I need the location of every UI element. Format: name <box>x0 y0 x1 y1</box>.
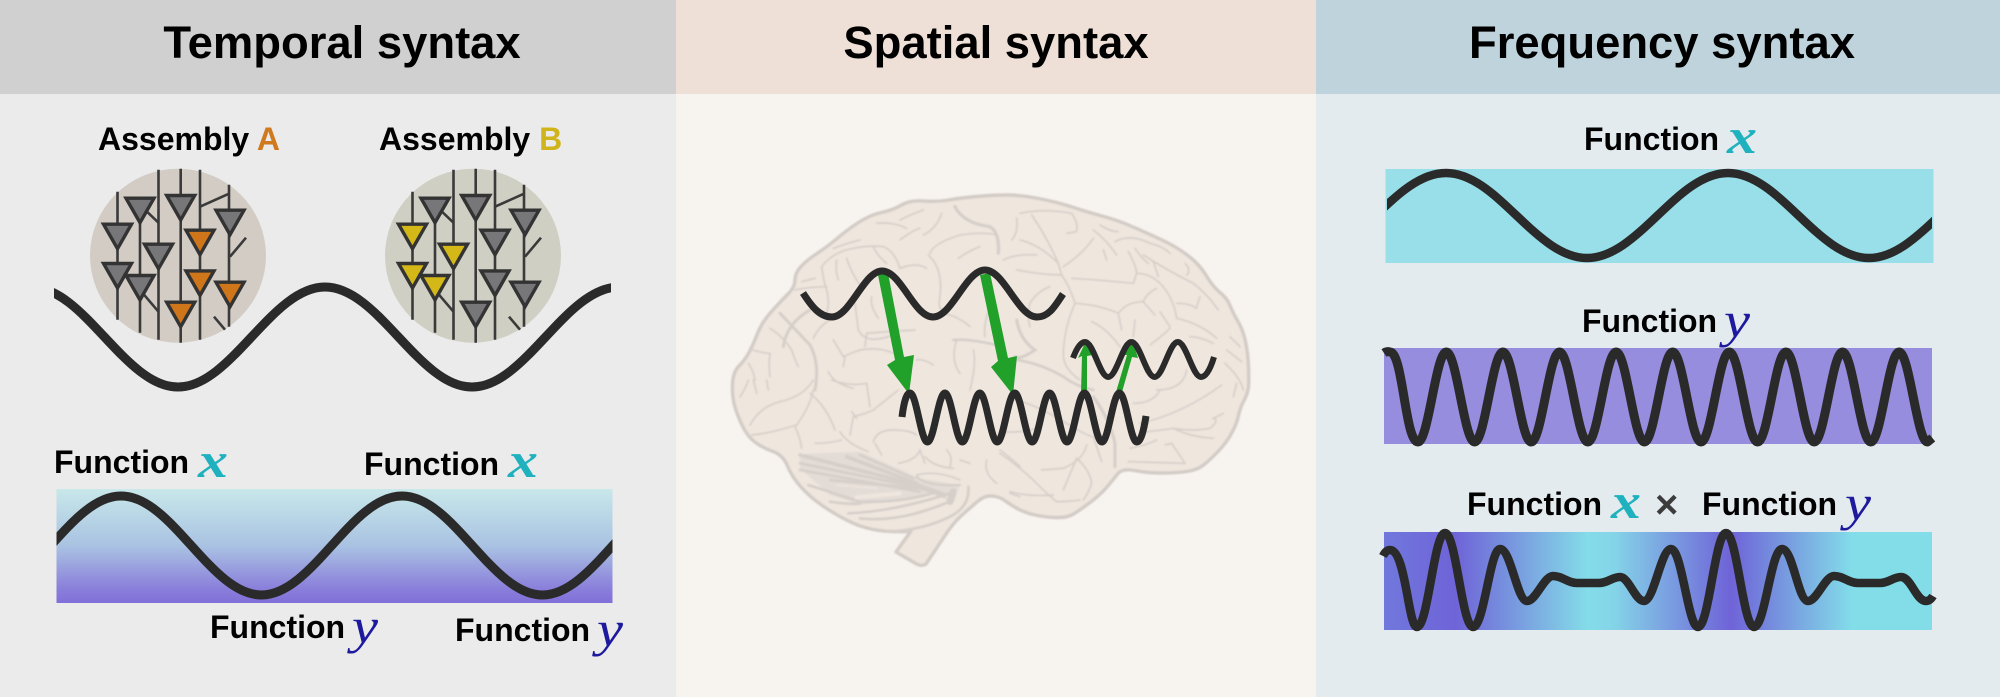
brain outline <box>732 195 1249 565</box>
temporal header bar <box>0 0 676 94</box>
wave: high frequency <box>1384 352 1932 442</box>
label: assembly A: Assembly A <box>98 121 280 157</box>
label: function y left: y <box>346 598 379 654</box>
label: function x <box>1584 108 1757 164</box>
label: function x right: Function <box>364 446 499 482</box>
label: function x times function y: Function <box>1467 486 1602 522</box>
neuron circle: assembly A <box>90 169 266 343</box>
label: function y left <box>210 598 379 654</box>
wave: slow oscillation on brain <box>803 270 1063 317</box>
label: function x: x <box>1726 108 1757 164</box>
label: function x left: Function <box>54 444 189 480</box>
band: product <box>1384 532 1932 630</box>
green arrows between regions <box>878 273 1138 395</box>
brain illustration <box>732 195 1249 565</box>
wave: low frequency <box>1387 168 1932 262</box>
label: function x right: x <box>507 432 538 488</box>
wave: medium oscillation on brain <box>1073 342 1214 377</box>
label: function x times function y <box>1467 473 1872 531</box>
brain sulci <box>740 207 1243 532</box>
label: function y right: y <box>591 601 624 657</box>
label: function y right <box>455 601 624 657</box>
label: function y right: Function <box>455 612 590 648</box>
label: function x times function y: x <box>1610 473 1641 529</box>
label: function x right <box>364 432 538 488</box>
heading: frequency syntax: Frequency syntax <box>1469 17 1855 68</box>
spatial header bar <box>676 0 1316 94</box>
arrow: slow wave to fast wave 2 <box>980 273 1017 395</box>
frequency header bar <box>1316 0 2000 94</box>
label: function x times function y: × <box>1655 483 1678 527</box>
band: function x <box>1386 169 1934 263</box>
oscillation wave under assemblies <box>31 287 619 387</box>
panel: spatial syntax <box>676 0 1316 697</box>
panel: frequency syntax <box>1305 0 2000 697</box>
neuron circle: assembly B <box>385 169 561 343</box>
heading: temporal syntax: Temporal syntax <box>163 17 521 68</box>
label: function y: y <box>1718 292 1751 348</box>
gradient band: temporal function <box>56 489 612 603</box>
label: function x left: x <box>197 432 228 488</box>
label: function y: Function <box>1582 303 1717 339</box>
label: function x times function y: y <box>1839 475 1872 531</box>
heading: spatial syntax: Spatial syntax <box>843 17 1149 68</box>
band: function y <box>1384 348 1932 444</box>
wave: product of functions <box>1383 533 1933 627</box>
label: assembly B: Assembly B <box>379 121 562 157</box>
wave on gradient band <box>56 492 612 600</box>
label: function y <box>1582 292 1751 348</box>
wave: fast oscillation on brain <box>902 393 1146 442</box>
arrow: fast wave up 1 <box>1078 343 1093 392</box>
label: function x times function y: Function <box>1702 486 1837 522</box>
label: function x: Function <box>1584 121 1719 157</box>
arrow: fast wave up 2 <box>1116 342 1138 392</box>
label: function x left <box>54 432 228 488</box>
label: function y left: Function <box>210 609 345 645</box>
panel: temporal syntax <box>0 0 683 697</box>
arrow: slow wave to fast wave 1 <box>878 273 914 394</box>
